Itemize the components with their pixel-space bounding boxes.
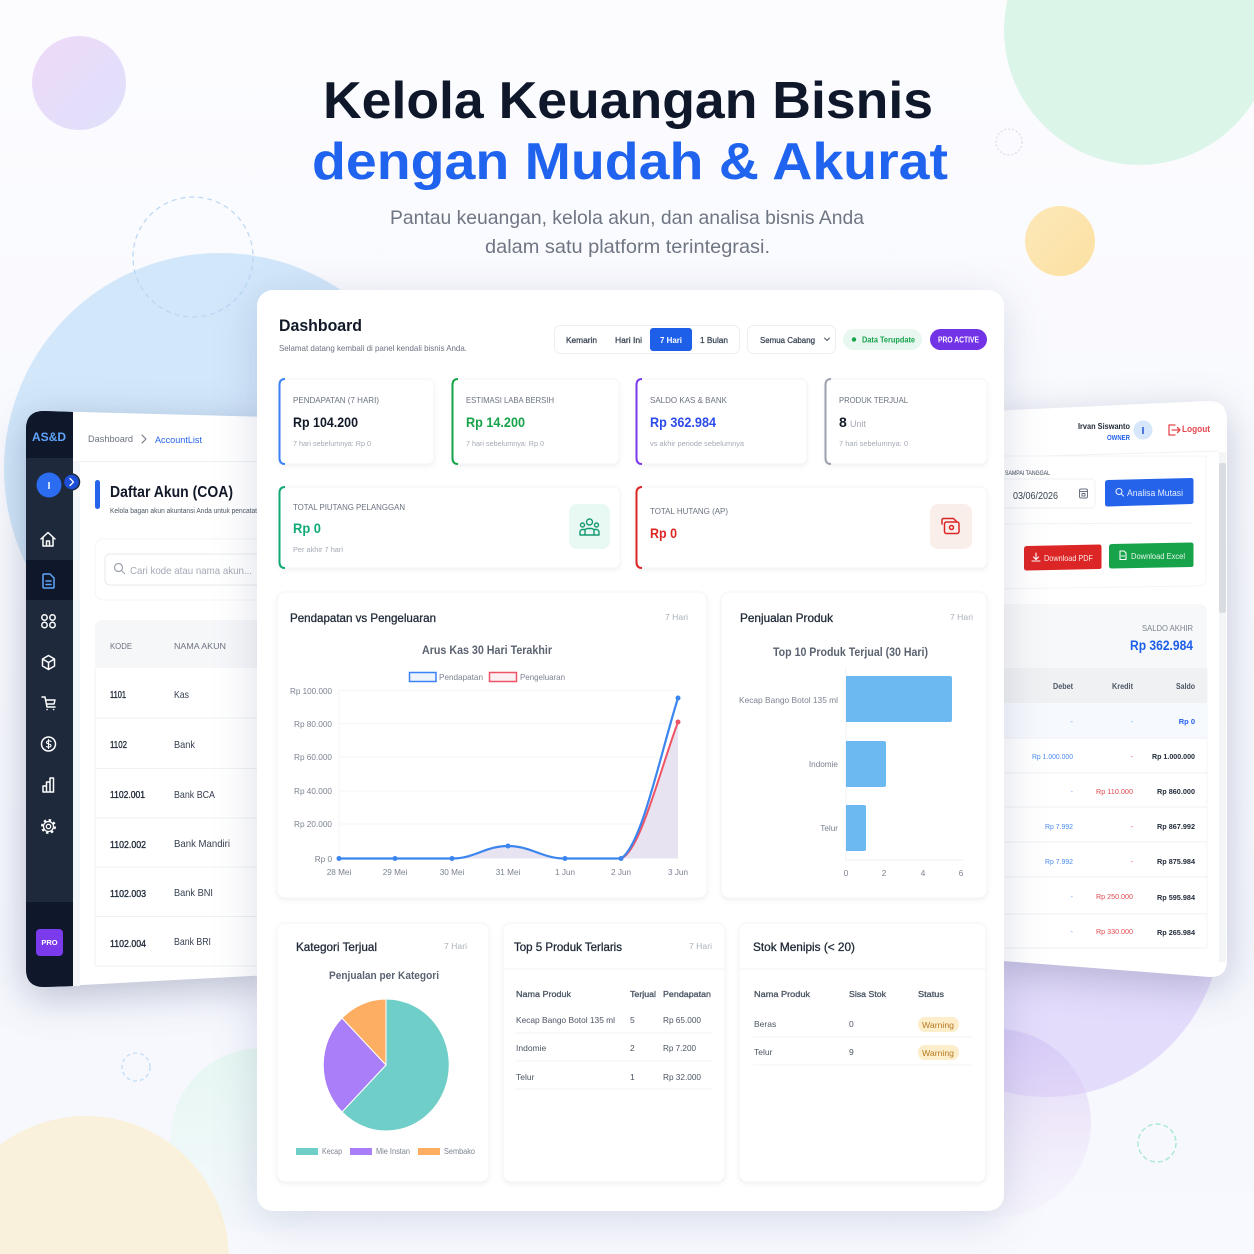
panel: bar chart: Penjualan Produk xyxy=(740,611,834,625)
panel: line chart: 29 Mei xyxy=(383,868,407,877)
filter card: 03/06/2026 xyxy=(1013,491,1058,502)
panel: top products table: 1 xyxy=(630,1072,635,1082)
kpi: total hutang: Rp 0 xyxy=(650,525,677,541)
icon: users xyxy=(569,504,610,549)
scrollbar xyxy=(1198,452,1226,962)
ledger table: Saldo xyxy=(1176,682,1195,691)
kpi: saldo kas: SALDO KAS & BANK xyxy=(650,395,727,405)
panel: low stock table: Stok Menipis (< 20) xyxy=(753,940,855,954)
sidebar toggle xyxy=(64,474,80,490)
page heading: Kelola bagan akun akuntansi Anda untuk pencatat xyxy=(110,508,257,515)
title: dengan Mudah & Akurat xyxy=(312,133,948,191)
panel: top products table: Nama Produk xyxy=(516,989,572,999)
kpi: laba bersih: 7 hari sebelumnya: Rp 0 xyxy=(466,439,544,448)
accounts table: Kas xyxy=(174,689,189,701)
panel: line chart: Rp 20.000 xyxy=(294,820,332,829)
panel: top products table xyxy=(503,923,725,1182)
legend: Pendapatan xyxy=(439,673,483,682)
accounts table: 1102 xyxy=(110,739,127,751)
saldo akhir: SALDO AKHIR xyxy=(1142,623,1193,633)
breadcrumb: Dashboard xyxy=(88,434,133,445)
ledger table: - xyxy=(1130,822,1134,831)
badge: warning: Warning xyxy=(922,1048,954,1058)
period tabs: Hari Ini xyxy=(615,335,642,345)
button: analisa mutasi: Analisa Mutasi xyxy=(1127,488,1183,498)
icon: cart xyxy=(42,697,55,710)
accounts table: Bank BCA xyxy=(174,789,215,801)
panel: left account list window xyxy=(26,411,285,987)
sidebar xyxy=(26,411,73,987)
button: analisa mutasi xyxy=(1105,478,1194,506)
panel: pie chart: 7 Hari xyxy=(444,941,467,951)
accounts table: Bank Mandiri xyxy=(174,838,230,850)
icon: bar chart xyxy=(43,778,54,792)
pro badge: PRO xyxy=(41,938,58,947)
icon: document xyxy=(43,574,54,588)
button: download pdf: Download PDF xyxy=(1044,553,1093,563)
area fill xyxy=(339,722,678,858)
ledger table: Rp 595.984 xyxy=(1157,893,1196,902)
icon: gear xyxy=(42,820,55,833)
pie legend: Sembako xyxy=(444,1147,475,1156)
kpi: produk terjual: 7 hari sebelumnya: 0 xyxy=(839,439,908,448)
panel: main dashboard xyxy=(257,290,1004,1211)
icon: dollar xyxy=(42,737,56,751)
panel: top products table: Terjual xyxy=(630,989,656,999)
panel: line chart: 28 Mei xyxy=(327,868,351,877)
badge: warning xyxy=(918,1017,959,1032)
panel: bar chart xyxy=(721,592,987,898)
kpi: total piutang xyxy=(279,487,620,568)
title: Kelola Keuangan Bisnis xyxy=(323,72,933,130)
user header: Irvan Siswanto xyxy=(1078,421,1130,431)
kpi: pendapatan: Rp 104.200 xyxy=(293,414,358,430)
panel: bar chart: 2 xyxy=(882,869,887,878)
panel: line chart: Rp 60.000 xyxy=(294,753,332,762)
branch select xyxy=(748,326,836,354)
panel: line chart: Rp 100.000 xyxy=(290,687,332,696)
panel: low stock table xyxy=(739,923,986,1182)
period tabs: Kemarin xyxy=(566,335,597,345)
accounts table: NAMA AKUN xyxy=(174,641,226,651)
ledger table: Rp 860.000 xyxy=(1157,787,1195,796)
panel: low stock table: Nama Produk xyxy=(754,989,811,999)
ledger table: Rp 7.992 xyxy=(1045,822,1073,831)
panel: top products table: Kecap Bango Botol 135 ml xyxy=(516,1015,615,1025)
ledger table: Rp 110.000 xyxy=(1096,787,1133,796)
panel: bar chart: 4 xyxy=(921,869,926,878)
pie legend: Mie Instan xyxy=(376,1147,410,1156)
panel: line chart: 31 Mei xyxy=(496,868,520,877)
kpi: pendapatan xyxy=(279,379,434,464)
kpi: total piutang: TOTAL PIUTANG PELANGGAN xyxy=(293,502,405,512)
ledger table: - xyxy=(1070,787,1074,796)
kpi: saldo kas xyxy=(636,379,807,464)
period tabs xyxy=(554,326,740,354)
panel: bar chart: Telur xyxy=(820,824,838,833)
kpi: laba bersih: Rp 14.200 xyxy=(466,414,525,430)
ledger table: Rp 265.984 xyxy=(1157,928,1196,937)
panel: top products table: Indomie xyxy=(516,1043,547,1053)
panel: line chart: 3 Jun xyxy=(668,868,688,877)
accounts table: 1102.003 xyxy=(110,888,146,900)
panel: pie chart: Kategori Terjual xyxy=(296,940,377,954)
panel: line chart: 1 Jun xyxy=(555,868,575,877)
panel: bar chart: 0 xyxy=(844,869,849,878)
ledger table: Rp 0 xyxy=(1179,717,1195,726)
ledger table: Debet xyxy=(1053,682,1073,691)
accounts table: 1102.002 xyxy=(110,839,146,851)
kpi: total piutang: Per akhir 7 hari xyxy=(293,545,343,554)
ledger table: Rp 867.992 xyxy=(1157,822,1195,831)
kpi: laba bersih: ESTIMASI LABA BERSIH xyxy=(466,395,554,405)
panel: line chart: Rp 80.000 xyxy=(294,720,332,729)
icon: wallet xyxy=(930,504,972,549)
panel: bar chart: Indomie xyxy=(809,760,838,769)
kpi: produk terjual xyxy=(825,379,987,464)
ledger table: Rp 1.000.000 xyxy=(1152,752,1195,761)
pie xyxy=(323,999,449,1131)
ledger table: - xyxy=(1070,927,1074,936)
accounts table: Bank xyxy=(174,739,196,751)
panel: top products table: 2 xyxy=(630,1043,635,1053)
panel: pie chart: Penjualan per Kategori xyxy=(329,970,439,982)
status pill xyxy=(843,329,922,350)
subtitle xyxy=(390,207,864,258)
panel: top products table: Rp 7.200 xyxy=(663,1043,696,1053)
user header: I xyxy=(1142,426,1145,437)
panel: bar chart: Top 10 Produk Terjual (30 Hari) xyxy=(773,647,928,659)
accounts table: KODE xyxy=(110,641,132,651)
ledger table: Rp 250.000 xyxy=(1096,892,1133,901)
subtitle: Pantau keuangan, kelola akun, dan analisa bisnis Anda xyxy=(390,207,864,229)
panel: low stock table: Telur xyxy=(754,1047,773,1057)
saldo akhir xyxy=(990,604,1207,669)
pie legend xyxy=(296,1147,475,1156)
search box xyxy=(95,539,285,600)
panel: top products table: Telur xyxy=(516,1072,535,1082)
panel: low stock table: Sisa Stok xyxy=(849,989,887,999)
panel: line chart: Rp 40.000 xyxy=(294,787,332,796)
kpi: produk terjual: Unit xyxy=(850,419,866,430)
ledger table: Rp 7.992 xyxy=(1045,857,1073,866)
user header: Logout xyxy=(1182,424,1211,435)
dashboard heading: Selamat datang kembali di panel kendali bisnis Anda. xyxy=(279,343,467,353)
pie legend: Kecap xyxy=(322,1147,342,1156)
panel: line chart: Arus Kas 30 Hari Terakhir xyxy=(422,645,552,657)
filter card xyxy=(990,456,1206,589)
filter card: SAMPAI TANGGAL xyxy=(1005,471,1051,477)
kpi: saldo kas: Rp 362.984 xyxy=(650,414,716,430)
user header: OWNER xyxy=(1107,435,1130,442)
page heading: Daftar Akun (COA) xyxy=(110,484,233,501)
dashboard heading: Dashboard xyxy=(279,316,362,335)
icon: home xyxy=(41,532,55,546)
ledger table: - xyxy=(1130,752,1134,761)
sidebar: AS&D xyxy=(32,430,66,444)
panel: pie chart xyxy=(277,923,489,1182)
panel: right ledger window xyxy=(990,401,1227,977)
ledger table: - xyxy=(1130,717,1134,726)
icon: cube xyxy=(42,656,54,670)
period tabs: 1 Bulan xyxy=(700,335,728,345)
page heading xyxy=(95,480,257,515)
panel: line chart xyxy=(277,592,707,898)
panel: low stock table: 9 xyxy=(849,1047,854,1057)
title xyxy=(312,72,948,191)
accounts table: 1102.004 xyxy=(110,938,146,950)
panel: bar chart: 7 Hari xyxy=(950,612,973,622)
button: download excel xyxy=(1109,542,1194,568)
panel: low stock table: 0 xyxy=(849,1019,854,1029)
legend: Pengeluaran xyxy=(520,673,565,682)
panel: low stock table: Status xyxy=(918,989,944,999)
panel: top products table: Rp 32.000 xyxy=(663,1072,701,1082)
kpi: produk terjual: PRODUK TERJUAL xyxy=(839,395,908,405)
button: download excel: Download Excel xyxy=(1131,551,1185,561)
kpi: total hutang xyxy=(636,487,987,568)
ledger table: - xyxy=(1130,857,1134,866)
accounts table: 1101 xyxy=(110,689,126,701)
status pill: Data Terupdate xyxy=(862,336,916,344)
panel: top products table: Pendapatan xyxy=(663,989,711,999)
ledger table: - xyxy=(1070,892,1074,901)
saldo akhir: Rp 362.984 xyxy=(1130,638,1193,653)
panel: line chart: Rp 0 xyxy=(315,855,332,864)
panel: low stock table: Beras xyxy=(754,1019,776,1029)
kpi: pendapatan: 7 hari sebelumnya: Rp 0 xyxy=(293,439,371,448)
ledger table: Rp 875.984 xyxy=(1157,857,1196,866)
kpi: total hutang: TOTAL HUTANG (AP) xyxy=(650,506,728,516)
panel: top products table: 7 Hari xyxy=(689,941,712,951)
search box: Cari kode atau nama akun... xyxy=(130,565,252,577)
bars xyxy=(846,676,952,851)
pro active pill xyxy=(930,329,987,350)
panel: top products table: 5 xyxy=(630,1015,635,1025)
badge: warning: Warning xyxy=(922,1020,954,1030)
panel: top products table: Top 5 Produk Terlaris xyxy=(514,940,622,954)
ledger table: - xyxy=(1070,717,1074,726)
ledger table: Rp 1.000.000 xyxy=(1032,752,1073,761)
panel: top products table: Rp 65.000 xyxy=(663,1015,701,1025)
breadcrumb xyxy=(88,434,202,446)
line: pendapatan xyxy=(336,696,680,861)
ledger table xyxy=(990,668,1207,948)
accounts table: Bank BNI xyxy=(174,887,213,899)
kpi: pendapatan: PENDAPATAN (7 HARI) xyxy=(293,395,379,405)
subtitle: dalam satu platform terintegrasi. xyxy=(485,236,770,258)
line: pengeluaran xyxy=(621,720,680,858)
legend xyxy=(410,672,565,682)
dashboard heading xyxy=(279,316,467,353)
accounts table: Bank BRI xyxy=(174,936,211,948)
icon: grid xyxy=(42,615,55,628)
badge: warning xyxy=(918,1045,959,1060)
panel: bar chart: 6 xyxy=(959,869,964,878)
pro badge xyxy=(36,929,63,956)
ledger table: Rp 330.000 xyxy=(1096,927,1133,936)
user header xyxy=(1078,420,1211,442)
kpi: produk terjual: 8 xyxy=(839,414,847,430)
panel: line chart: 2 Jun xyxy=(611,868,631,877)
kpi: laba bersih xyxy=(452,379,619,464)
ledger table: Kredit xyxy=(1112,682,1133,691)
panel: line chart: 7 Hari xyxy=(665,612,688,622)
period tabs: 7 Hari xyxy=(660,335,682,345)
accounts table: 1102.001 xyxy=(110,789,145,801)
sidebar: I xyxy=(48,481,51,492)
panel: line chart: Pendapatan vs Pengeluaran xyxy=(290,611,436,625)
kpi: total piutang: Rp 0 xyxy=(293,520,321,536)
button: download pdf xyxy=(1024,544,1102,570)
kpi: saldo kas: vs akhir periode sebelumnya xyxy=(650,439,745,448)
accounts table xyxy=(95,620,270,966)
panel: bar chart: Kecap Bango Botol 135 ml xyxy=(739,696,838,705)
breadcrumb: AccountList xyxy=(155,435,202,446)
panel: line chart: 30 Mei xyxy=(440,868,464,877)
pro active pill: PRO ACTIVE xyxy=(938,336,980,344)
branch select: Semua Cabang xyxy=(760,335,815,345)
